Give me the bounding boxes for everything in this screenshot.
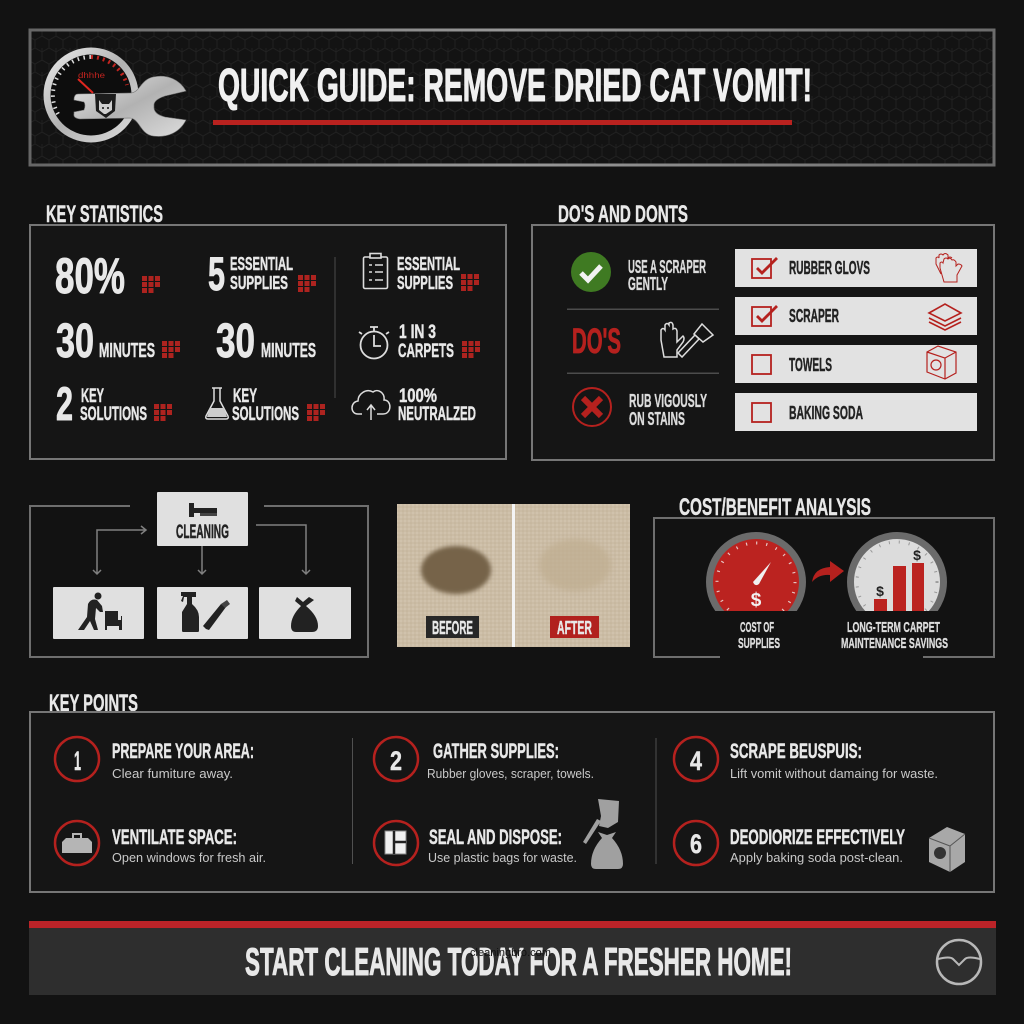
panel: do's and don'ts [532, 201, 994, 460]
don't item: rub vigorously: ON STAINS [629, 409, 685, 429]
checklist row: towels [735, 345, 977, 383]
panel: before and after photo [397, 504, 630, 647]
stat: 5 essential supplies: 5 [208, 247, 225, 300]
stat: 5 essential supplies [208, 247, 316, 300]
point: ventilate space: VENTILATE SPACE: [112, 826, 237, 849]
point 1: prepare your area: Clear fumiture away. [112, 766, 233, 781]
label: before: BEFORE [432, 618, 473, 638]
title underline [213, 120, 792, 125]
point: ventilate space: Open windows for fresh air. [112, 850, 266, 865]
flow box: spray and scraper [157, 587, 248, 639]
point 2: gather supplies: Rubber gloves, scraper, towels. [427, 766, 594, 781]
icon stat: flask key solutions: SOLUTIONS [232, 404, 299, 425]
icon stat: clipboard essential supplies: SUPPLIES [397, 273, 453, 293]
point 2: gather supplies: GATHER SUPPLIES: [433, 740, 559, 763]
don't item: rub vigorously: RUB VIGOUSLY [629, 391, 707, 411]
stat: 2 key solutions: SOLUTIONS [80, 404, 147, 425]
stat: 30 minutes [56, 315, 180, 368]
stat: 2 key solutions [56, 377, 172, 430]
point 4: scrape residue: Lift vomit without damaing for waste. [730, 766, 938, 781]
point 1: prepare your area: PREPARE YOUR AREA: [112, 740, 254, 763]
gauge: cost of supplies: $ [751, 590, 762, 611]
point 1: prepare your area [55, 737, 254, 781]
point 4: scrape residue: 4 [690, 746, 702, 776]
icon stat: cloud 100% neutralized [352, 386, 476, 425]
flow box: garbage bag [259, 587, 351, 639]
icon stat: stopwatch 1 in 3 carpets [359, 322, 480, 362]
checklist row: rubber gloves: RUBBER GLOVS [789, 258, 870, 278]
stat: 30 minutes second: MINUTES [261, 340, 316, 362]
label: after [550, 616, 599, 638]
footer banner [29, 921, 996, 995]
panel: cost benefit analysis [654, 494, 994, 657]
stat: 5 essential supplies: ESSENTIAL [230, 254, 293, 274]
do item: use a scraper gently: USE A SCRAPER [628, 257, 706, 277]
checklist row: scraper: SCRAPER [789, 306, 839, 326]
stat: 5 essential supplies: SUPPLIES [230, 273, 288, 293]
checklist row: baking soda [735, 393, 977, 431]
point 2: gather supplies [374, 737, 594, 781]
checklist row: baking soda: BAKING SODA [789, 403, 863, 423]
point: seal and dispose [374, 821, 577, 865]
point 4: scrape residue: SCRAPE BEUSPUIS: [730, 740, 862, 763]
icon: footer emblem [937, 940, 981, 984]
caption: long-term savings: LONG-TERM CARPET [847, 619, 940, 636]
stain: after [539, 539, 611, 591]
heading: do's and donts: DO'S AND DONTS [558, 201, 688, 228]
heading: cost/benefit analysis: COST/BENEFIT ANALYSIS [679, 494, 871, 521]
point: seal and dispose: Use plastic bags for waste. [428, 850, 577, 865]
arrow: cleaning loop left [93, 526, 146, 574]
caption: long-term savings [841, 619, 948, 652]
stat: 2 key solutions: KEY [81, 386, 104, 407]
label: do's: DO'S [572, 322, 621, 361]
icon: gauge and wrench with cat logo: dhhhe [78, 71, 106, 80]
checklist row: towels: TOWELS [789, 355, 832, 375]
point 6: deodorize effectively: Apply baking soda post-clean. [730, 850, 903, 865]
flow box: cleaning [157, 492, 248, 546]
do item: use a scraper gently [571, 252, 706, 294]
gauge: long-term savings: $ [913, 547, 921, 563]
stat: 80%: 80% [55, 248, 125, 304]
icon stat: cloud 100% neutralized: NEUTRALZED [398, 404, 476, 425]
icon stat: cloud 100% neutralized: 100% [399, 386, 437, 407]
point 6: deodorize effectively: DEODIORIZE EFFECTIVELY [730, 826, 905, 849]
point 6: deodorize effectively [674, 821, 905, 865]
watermark: cleaningbro.com [470, 947, 551, 959]
icon stat: clipboard essential supplies [364, 254, 479, 293]
icon: gauge and wrench with cat logo [47, 51, 186, 139]
stain: before [421, 546, 491, 594]
icon stat: stopwatch 1 in 3 carpets: 1 IN 3 [399, 322, 436, 343]
icon stat: flask key solutions: KEY [233, 386, 257, 407]
icon: glove and scraper [661, 322, 713, 357]
icon: scraper and bag [583, 799, 623, 869]
icon stat: stopwatch 1 in 3 carpets: CARPETS [398, 341, 454, 362]
stat: 2 key solutions: 2 [56, 377, 73, 430]
caption: cost of supplies: COST OF [740, 619, 774, 636]
gauge: long-term savings: $ [876, 583, 884, 599]
caption: long-term savings: MAINTENANCE SAVINGS [841, 635, 948, 652]
stat: 30 minutes: MINUTES [99, 340, 155, 362]
flow box: move furniture [53, 587, 144, 639]
header banner [30, 30, 994, 165]
point 4: scrape residue [674, 737, 938, 781]
point 2: gather supplies: 2 [390, 746, 402, 776]
point 1: prepare your area: 1 [74, 746, 81, 776]
gauge: cost of supplies [710, 536, 802, 628]
panel: cleaning flowchart [30, 492, 368, 657]
stat: 30 minutes second [216, 315, 316, 368]
don't item: rub vigorously [573, 388, 707, 429]
arrow: cost to savings [812, 561, 844, 582]
label: after: AFTER [557, 618, 592, 638]
heading: key points: KEY POINTS [49, 690, 138, 717]
arrow: cleaning to disposal [256, 525, 310, 574]
point: ventilate space [55, 821, 266, 865]
stat: 30 minutes: 30 [56, 315, 94, 368]
checklist row: rubber gloves [735, 249, 977, 287]
gauge: long-term savings [850, 536, 944, 628]
caption: cost of supplies [738, 619, 780, 652]
label: before [426, 616, 479, 638]
do item: use a scraper gently: GENTLY [628, 274, 668, 294]
checklist row: scraper [735, 297, 977, 335]
heading: key statistics: KEY STATISTICS [46, 201, 163, 228]
stat: 30 minutes second: 30 [216, 315, 255, 368]
caption: cost of supplies: SUPPLIES [738, 635, 780, 652]
icon: baking soda box [929, 827, 965, 872]
flow box: cleaning: CLEANING [176, 522, 229, 543]
point 6: deodorize effectively: 6 [690, 829, 702, 859]
panel: key statistics [30, 201, 506, 459]
panel: key points [30, 690, 994, 892]
point: seal and dispose: SEAL AND DISPOSE: [429, 826, 562, 849]
icon stat: clipboard essential supplies: ESSENTIAL [397, 254, 460, 274]
icon stat: flask key solutions [206, 386, 325, 425]
arrow: cleaning to supplies [198, 546, 206, 574]
